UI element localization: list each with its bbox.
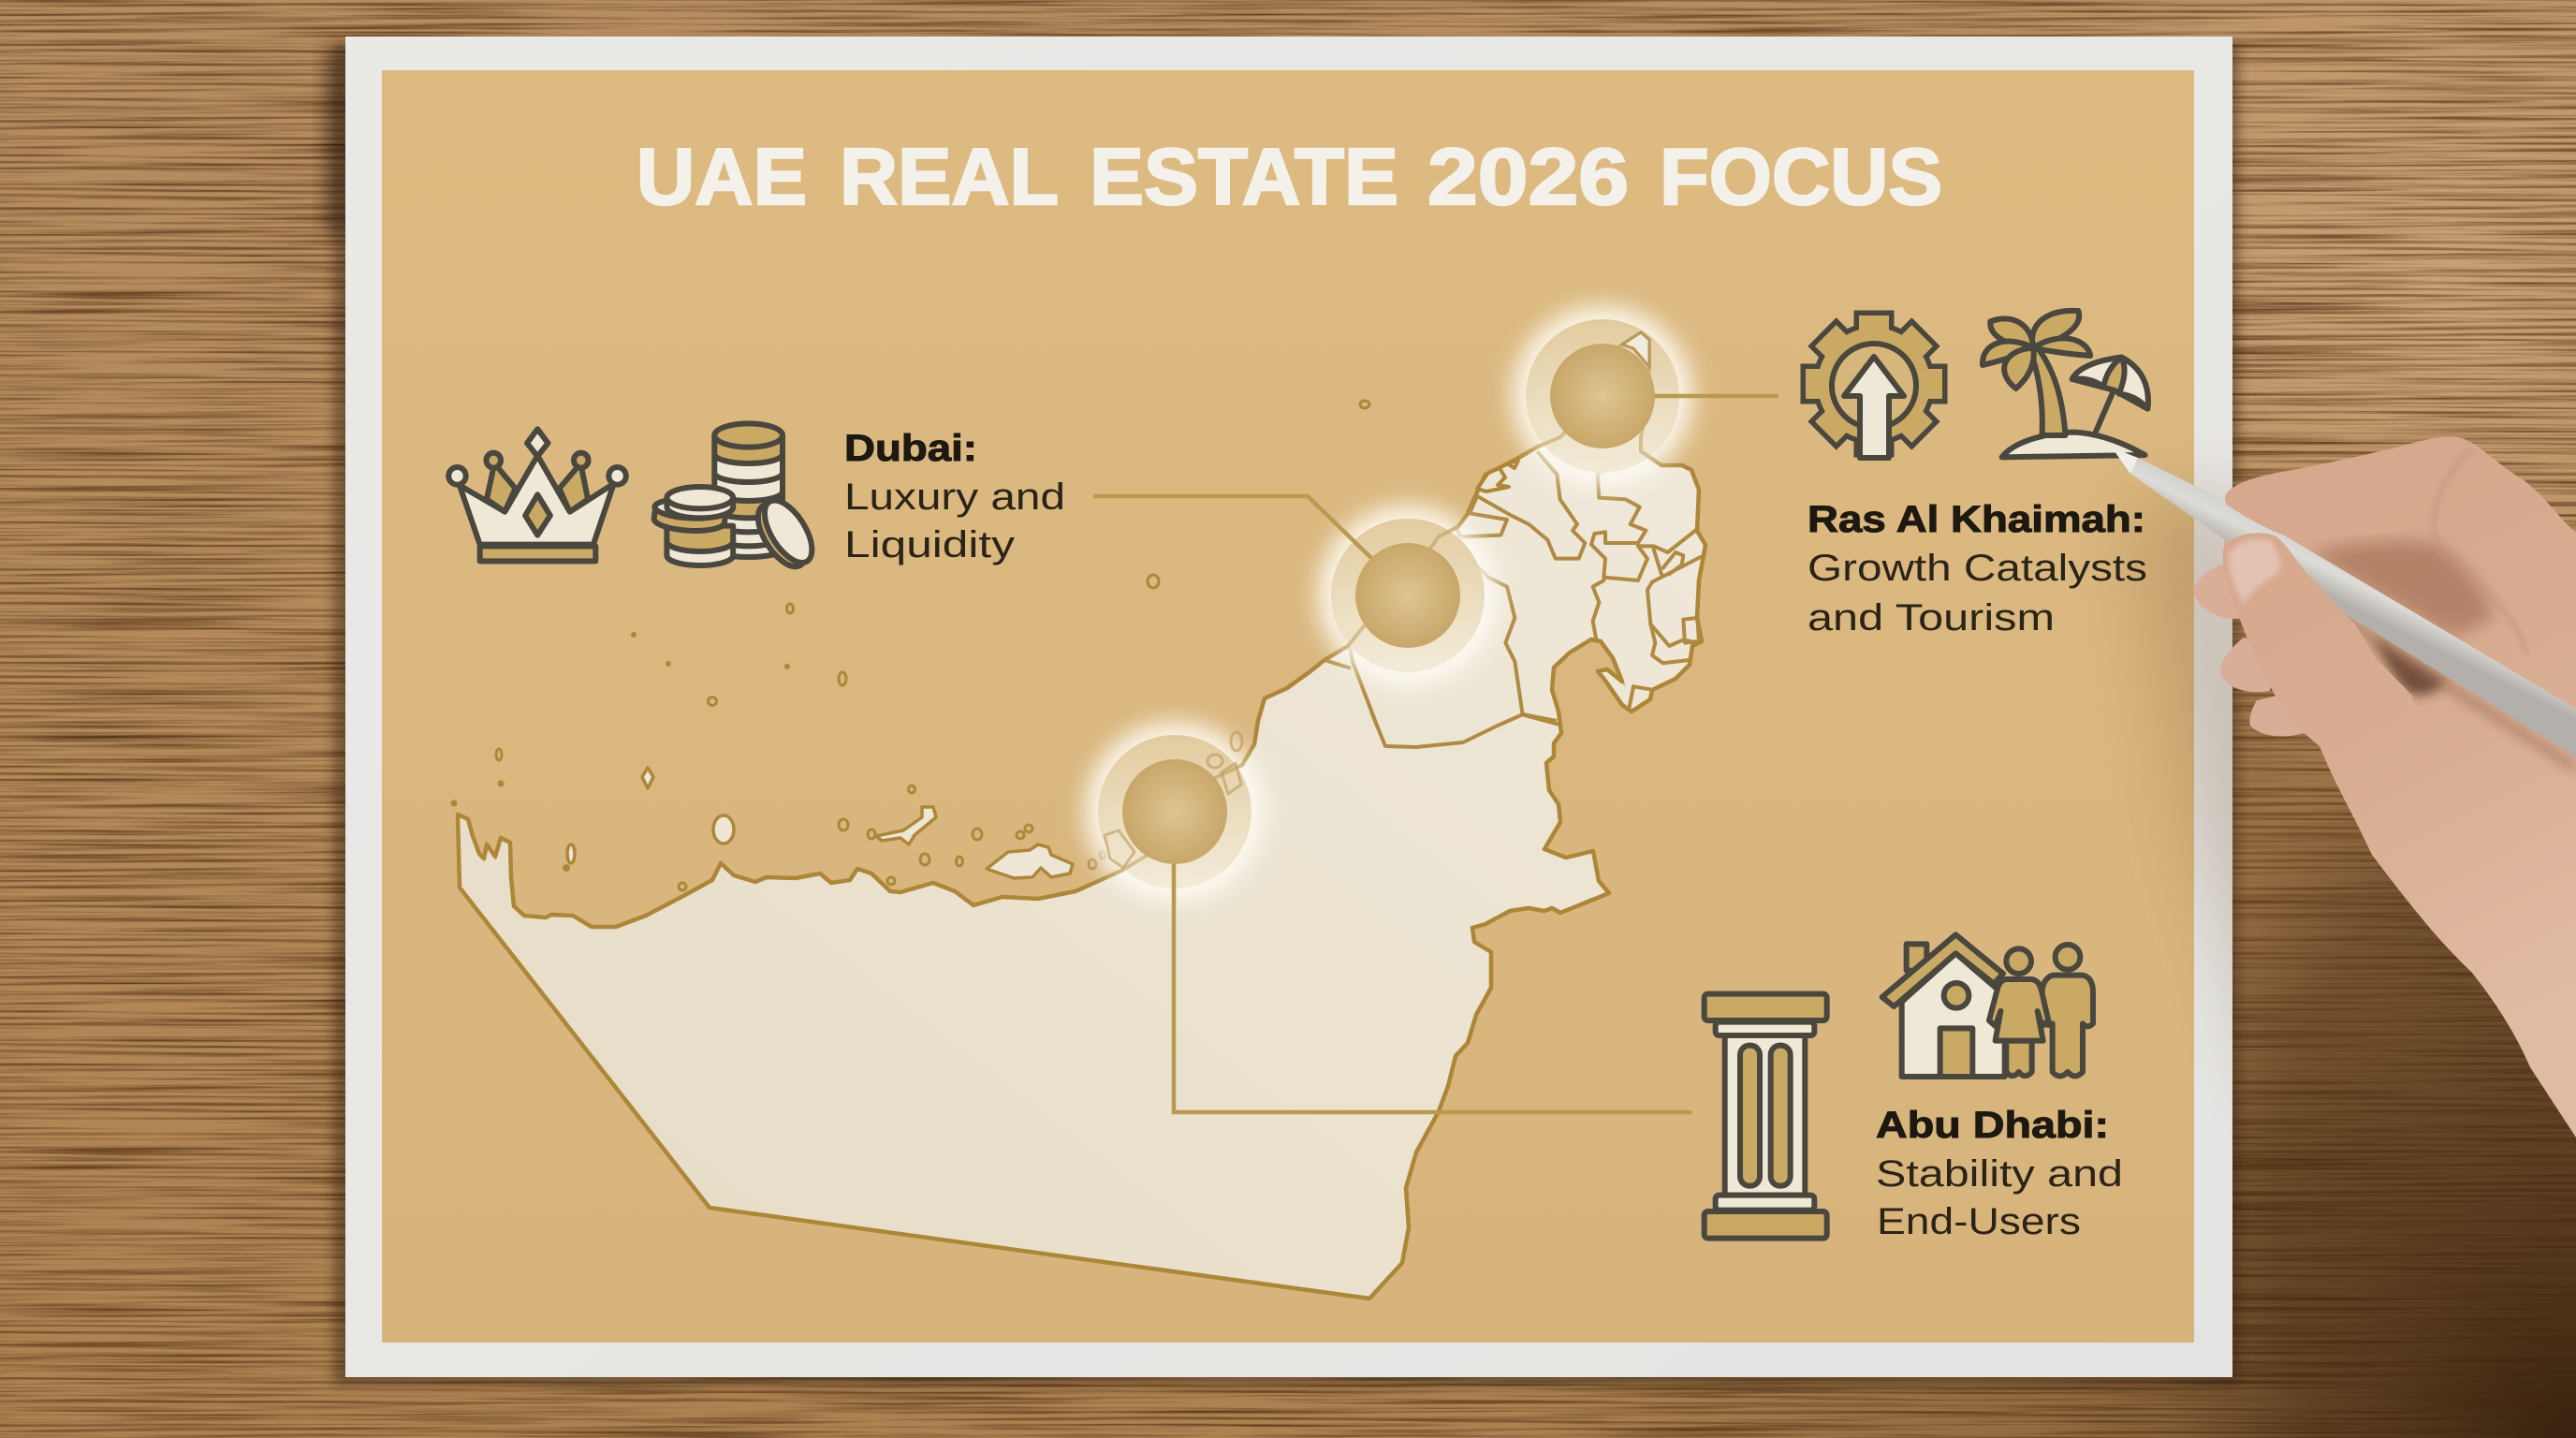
text: Ras Al Khaimah: Growth Catalysts [1808, 548, 2147, 589]
hand: soft shading [2312, 449, 2576, 768]
text: Dubai: Liquidity [844, 524, 1015, 565]
hand: lower fingers [2193, 565, 2307, 736]
map: small island dots [496, 401, 1369, 890]
icon: crown [448, 429, 626, 561]
text: Dubai: Dubai: [844, 428, 977, 469]
text: Abu Dhabi: End-Users [1877, 1201, 2081, 1242]
text: Dubai: Luxury and [844, 477, 1065, 518]
map: faint islands seen through the Abu Dhabi glow [1105, 732, 1242, 868]
stylus [2130, 458, 2576, 756]
hand: index finger [2225, 450, 2383, 536]
title: UAE [637, 133, 807, 222]
map: northern lagoon squiggle [1477, 461, 1518, 492]
text: Ras Al Khaimah: Ras Al Khaimah: [1808, 499, 2145, 540]
map: UAE landmass with emirate borders and islands [451, 332, 1705, 1299]
text: Abu Dhabi: Abu Dhabi: [1876, 1105, 2109, 1146]
marker: Abu Dhabi [1122, 759, 1227, 864]
hand: thumb nail [2229, 539, 2280, 604]
marker: Ras Al Khaimah [1550, 344, 1655, 448]
hand shadow on the poster [2125, 487, 2481, 1123]
title: 2026 [1427, 133, 1629, 222]
hand holding stylus [2112, 436, 2576, 1137]
icon: coin stacks [652, 423, 823, 570]
panel: white paper sheet [345, 37, 2232, 1377]
text: Ras Al Khaimah [1808, 499, 2147, 638]
hand: thumb [2223, 533, 2434, 855]
map: mainland outline [458, 332, 1705, 1299]
marker: Dubai [1355, 543, 1460, 648]
paper drop shadow [323, 43, 2239, 1386]
icon: classical pillar [1705, 994, 1827, 1239]
stylus tip [2112, 448, 2138, 474]
text: Ras Al Khaimah: and Tourism [1808, 597, 2055, 638]
map outline showing faintly through the glows [458, 332, 1705, 1299]
icon: house with couple [1882, 934, 2093, 1077]
marker glows [1085, 306, 1692, 902]
icon: gear with up arrow [1806, 315, 1942, 458]
connector: Abu Dhabi [1174, 861, 1691, 1112]
panel: gold poster area [382, 70, 2194, 1343]
title: ESTATE [1090, 133, 1398, 222]
text: Abu Dhabi: Stability and [1876, 1153, 2123, 1195]
title: FOCUS [1660, 133, 1942, 222]
connector: Dubai [1093, 496, 1371, 558]
text: Abu Dhabi [1876, 1105, 2123, 1242]
hand: palm and wrist [2224, 436, 2576, 1137]
map: emirate borders [1310, 452, 1701, 727]
map: Sharjah southern border [1371, 712, 1557, 747]
map: Musandam tip seen through the glow [1622, 332, 1649, 367]
icon: palm tree, umbrella and island [1983, 311, 2148, 457]
connector: Ras Al Khaimah [1652, 394, 1778, 398]
title [637, 133, 1942, 222]
map: offshore islands [567, 768, 1073, 878]
title: REAL [840, 133, 1059, 222]
text: Dubai [844, 428, 1065, 565]
